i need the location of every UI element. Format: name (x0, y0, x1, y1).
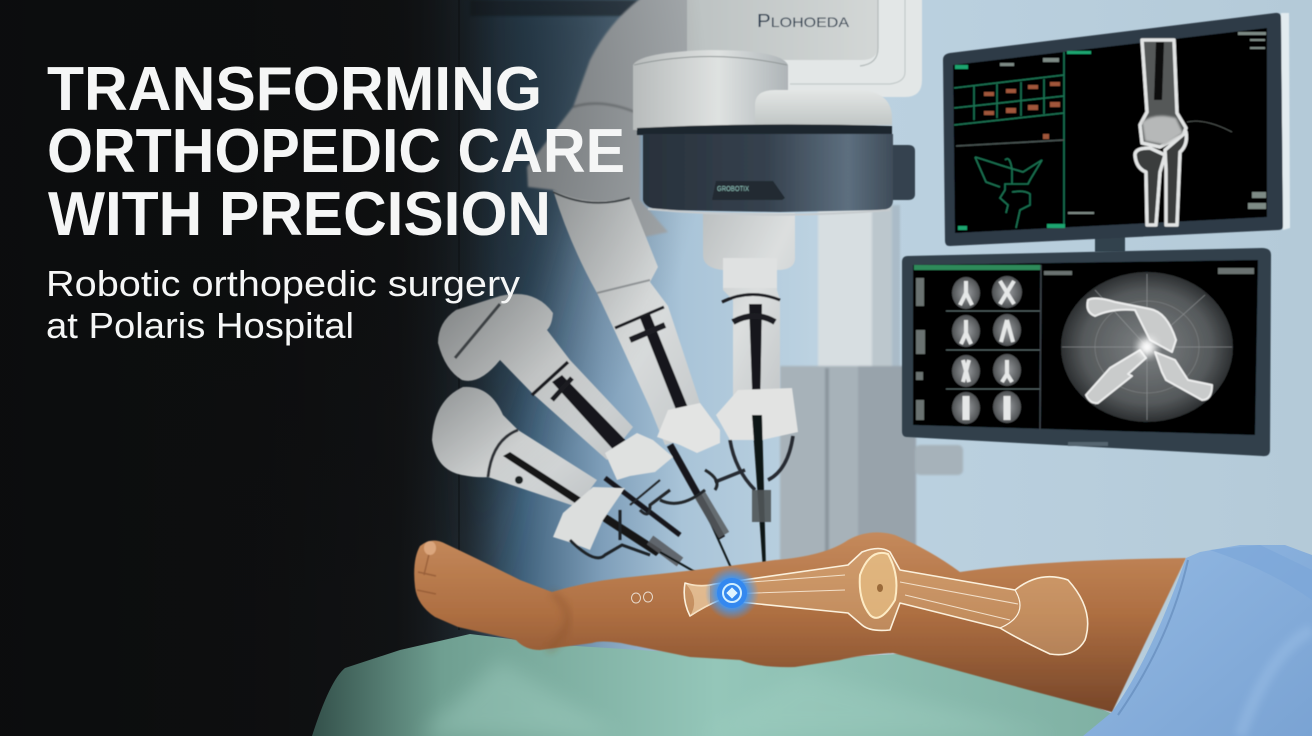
large CT scan (1061, 272, 1233, 422)
device label (712, 181, 785, 200)
lower monitor (902, 248, 1271, 456)
title: TRANSFORMING (47, 55, 542, 124)
title (47, 55, 625, 249)
glowing surgical target (705, 566, 759, 620)
x-ray: knee bones (1135, 40, 1186, 225)
left dark fade (0, 0, 720, 640)
robot arm 1 (432, 387, 716, 584)
surgical bed (312, 634, 1120, 736)
subtitle (46, 263, 520, 346)
surgical blanket (1083, 545, 1312, 736)
marker rings on skin (632, 592, 652, 603)
title: WITH PRECISION (48, 180, 551, 249)
robot: main dark head unit (633, 50, 915, 215)
small CT scans (946, 276, 1040, 424)
title: ORTHOPEDIC CARE (47, 117, 625, 186)
robot: top white housing (687, 0, 922, 97)
patient leg (414, 532, 1186, 712)
subtitle: Robotic orthopedic surgery (46, 263, 520, 304)
robot arm 3 (553, 190, 720, 453)
orange readouts (984, 82, 1060, 139)
subtitle: at Polaris Hospital (46, 305, 354, 346)
brand label: PLOHOEDA (757, 11, 850, 31)
device label: GROBOTIX (717, 186, 749, 193)
upper monitor (943, 13, 1290, 252)
robot arm 2 (438, 294, 732, 570)
bone hologram overlay (684, 548, 1088, 655)
green data table and outline (954, 52, 1064, 228)
robot: upper shoulder arm (527, 0, 692, 240)
equipment column (780, 205, 963, 562)
robot arm 4 (703, 213, 798, 570)
screen readout bars (1000, 32, 1266, 214)
